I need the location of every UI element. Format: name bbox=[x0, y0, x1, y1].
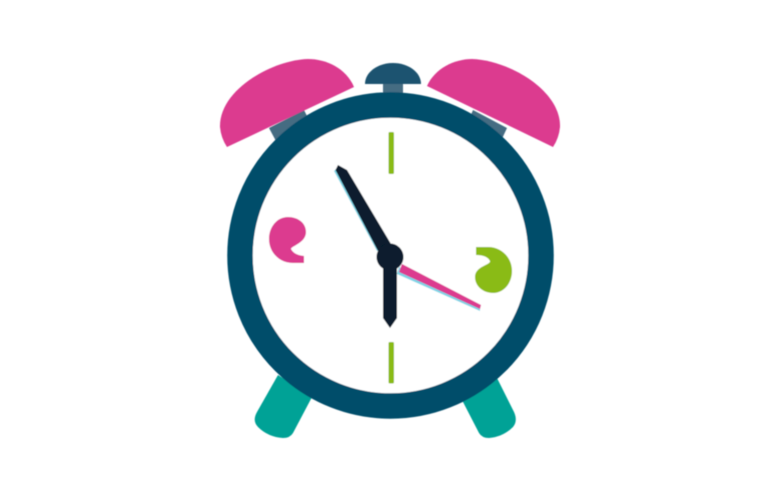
left foot bbox=[255, 375, 312, 438]
minute hand shadow bbox=[334, 168, 380, 251]
left bell connector bbox=[269, 110, 310, 143]
bottom tick bbox=[388, 342, 394, 384]
left pink mark bbox=[269, 217, 306, 263]
top button stem bbox=[383, 82, 403, 96]
right bell connector bbox=[468, 110, 507, 143]
right green mark bbox=[475, 247, 512, 293]
clock ring bbox=[240, 105, 541, 406]
hour hand bbox=[383, 255, 397, 328]
clock artwork bbox=[220, 59, 560, 438]
right bell bbox=[427, 59, 560, 147]
second hand bbox=[399, 264, 481, 309]
minute hand bbox=[336, 165, 391, 251]
top button cap bbox=[365, 63, 421, 84]
second hand shadow bbox=[397, 267, 480, 311]
centre hub bbox=[376, 244, 404, 270]
left bell bbox=[220, 59, 354, 147]
right foot bbox=[462, 378, 516, 438]
top tick bbox=[388, 132, 394, 174]
